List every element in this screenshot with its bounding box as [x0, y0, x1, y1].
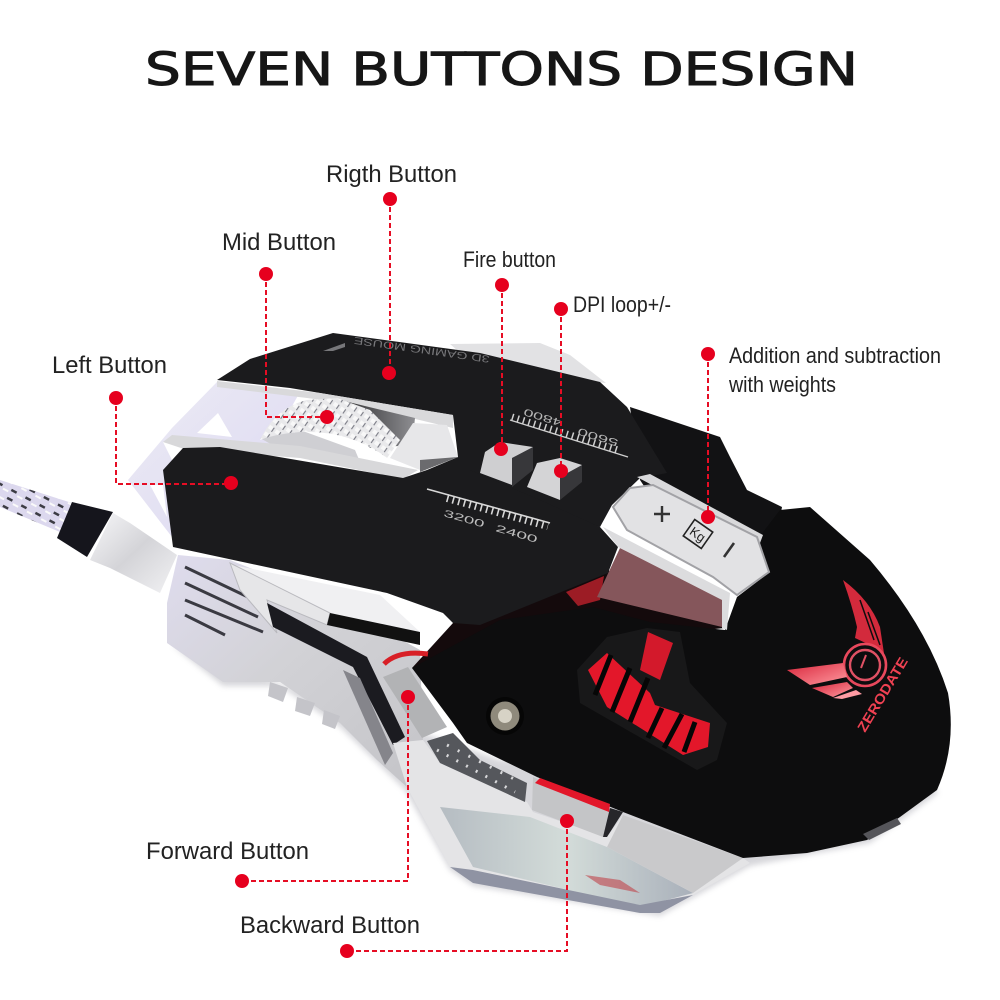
- top panel print: [323, 334, 490, 364]
- label: fire button: Fire button: [463, 247, 556, 272]
- fire button shade: [512, 447, 533, 487]
- label: backward button: Backward Button: [240, 912, 420, 939]
- label: addition and subtraction with weights: [728, 343, 941, 397]
- label: right button: Rigth Button: [326, 161, 457, 188]
- top black panel: [217, 333, 667, 527]
- plus sign: [654, 506, 670, 522]
- left silver wing: [128, 382, 300, 537]
- grille slots: [185, 567, 263, 635]
- weight upper strip: [637, 474, 763, 543]
- lower DPI scale: [427, 489, 550, 546]
- silver rear cover: [450, 343, 606, 383]
- side teeth: [268, 682, 340, 729]
- vent fin gaps: [595, 655, 695, 752]
- wheel pocket: [340, 400, 415, 448]
- rear black shell: [630, 407, 782, 570]
- red cavity glint: [566, 576, 604, 606]
- fire button: [480, 442, 533, 485]
- scroll wheel: [260, 398, 400, 458]
- cable metal tube: [90, 513, 177, 593]
- red wire: [384, 653, 428, 664]
- red vent fins: [588, 653, 710, 755]
- Kg weight icon: [683, 519, 713, 549]
- central cavity: [412, 570, 725, 668]
- Kg weight icon: Kg: [687, 524, 708, 545]
- top panel print: 3D GAMING MOUSE: [353, 334, 490, 364]
- shell outer rim: [450, 867, 693, 913]
- palm screw: [486, 697, 524, 735]
- weight lower strip: [603, 527, 730, 630]
- grip block beside wheel: [390, 423, 458, 470]
- brushed metal rear strip: [607, 815, 743, 893]
- upper DPI scale: 4800: [522, 405, 564, 428]
- red vent upright: [640, 632, 673, 680]
- title: SEVEN BUTTONS DESIGN: [145, 43, 858, 96]
- upper DPI scale: 5600: [576, 425, 620, 448]
- logo: winged power badge: ZERODATE: [854, 654, 911, 735]
- gray bevel: [343, 670, 393, 765]
- red glow in shell: [585, 875, 640, 893]
- upper white body area: [233, 565, 420, 645]
- black rail bar: [327, 613, 420, 645]
- braided cable: [0, 480, 72, 532]
- left side silver body: [167, 555, 423, 787]
- forward button metal: [383, 667, 447, 738]
- label: left button: Left Button: [52, 352, 167, 379]
- logo: winged power badge: [787, 580, 911, 735]
- backward button metal: [532, 777, 610, 837]
- DPI button: [527, 458, 582, 500]
- weight adjust button: [613, 485, 769, 595]
- translucent shell panel: [440, 807, 693, 907]
- red speckled support: [597, 548, 722, 627]
- label: DPI loop: DPI loop+/-: [573, 292, 671, 317]
- product photo: gaming mouse: [0, 333, 951, 916]
- left-button silver rail: [163, 435, 418, 479]
- lower DPI scale: 2400: [494, 523, 539, 546]
- scroll wheel underlay: [260, 430, 360, 462]
- dotted grip strip: [427, 733, 527, 802]
- callout dots: [109, 192, 715, 958]
- metal rail: [230, 563, 330, 633]
- backward button shade: [603, 808, 623, 837]
- label: addition and subtraction with weights: Addition and subtraction: [729, 343, 941, 368]
- red strip above backward button: [535, 778, 610, 812]
- label: forward button: Forward Button: [146, 838, 309, 865]
- cable collar: [57, 502, 113, 557]
- bottom silver shell: [393, 740, 750, 913]
- label: addition and subtraction with weights: with weights: [728, 372, 836, 397]
- wing cut-out lower: [150, 485, 167, 517]
- upper DPI scale: [510, 405, 628, 457]
- side scroll knob: [863, 818, 901, 840]
- soft ground shadow: [172, 645, 938, 916]
- lower DPI scale: 3200: [442, 508, 486, 531]
- big black palm rest: [412, 507, 951, 858]
- black diagonal seam: [267, 603, 405, 745]
- callout lines: [116, 199, 708, 951]
- minus sign: [724, 543, 734, 557]
- left black button: [163, 447, 618, 625]
- grip block bevel: [420, 457, 458, 472]
- right-button silver rail: [217, 381, 453, 428]
- wing cut-out: [197, 413, 232, 437]
- heat vent recess: [577, 628, 727, 770]
- label: mid button: Mid Button: [222, 229, 336, 256]
- DPI button shade: [560, 465, 582, 500]
